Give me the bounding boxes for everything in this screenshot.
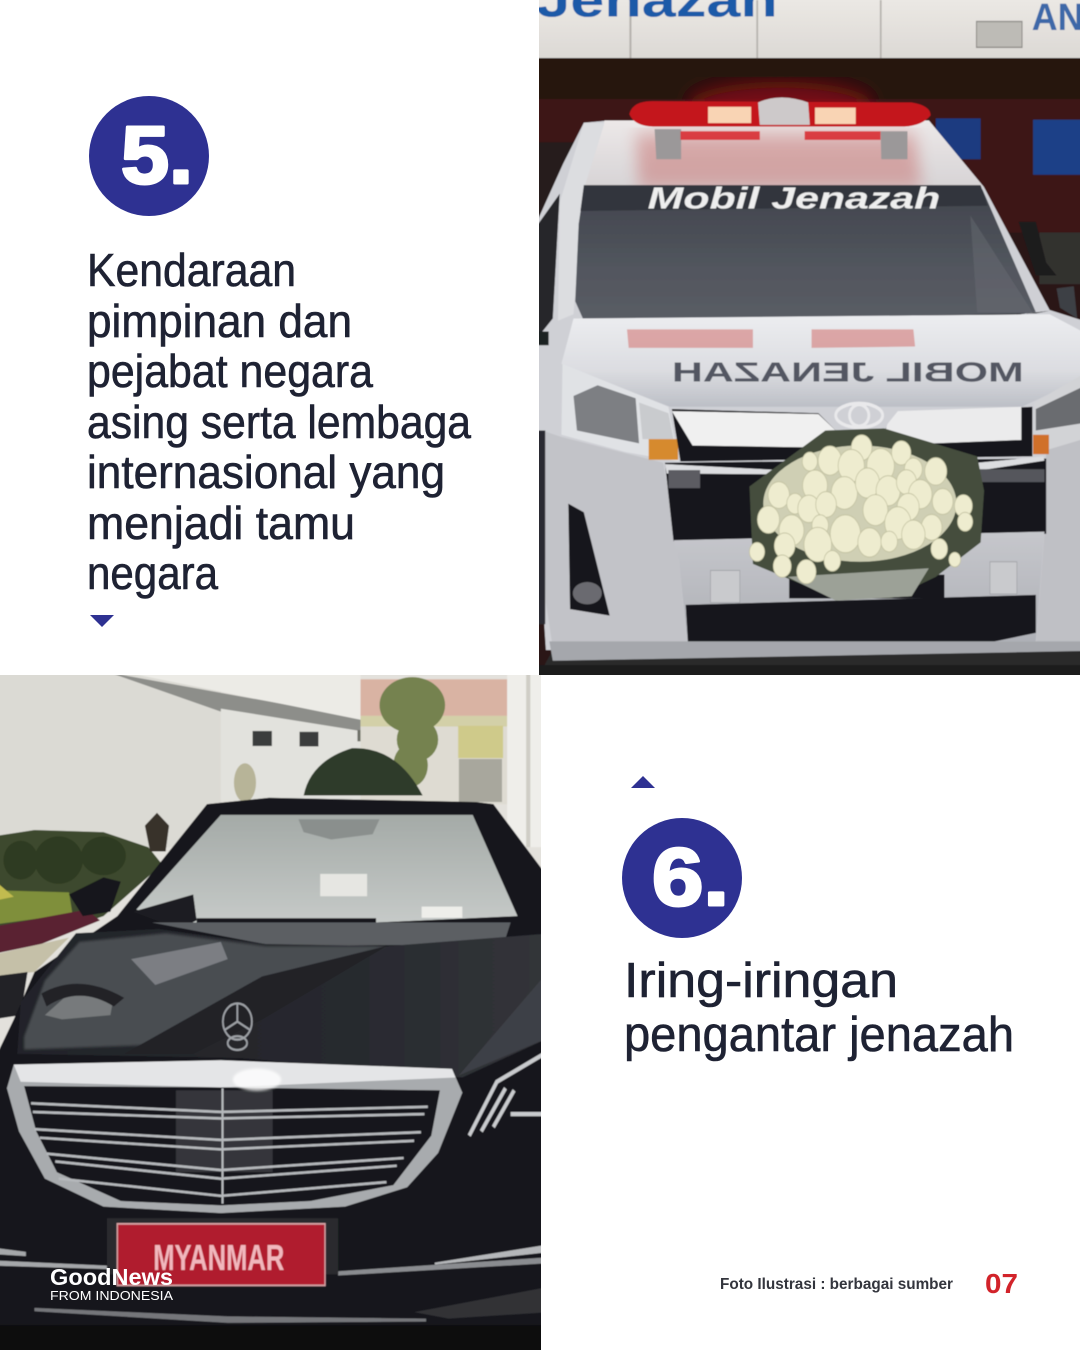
text block: item 6 (624, 954, 1014, 1062)
text block: item 5 (87, 244, 472, 599)
photo: white hearse van: MOBIL JENAZAH (672, 357, 1024, 388)
chrome grille bar (672, 407, 1032, 461)
text block: item 5: menjadi tamu (87, 497, 355, 549)
windshield (136, 815, 518, 923)
number badge 5 (89, 96, 209, 216)
headlights (561, 364, 679, 461)
lower grille (665, 458, 1046, 542)
photo credit: Foto Ilustrasi : berbagai sumber (720, 1276, 953, 1293)
license plate (107, 1218, 338, 1285)
text block: item 5: pejabat negara (87, 345, 373, 397)
headlight (459, 1041, 551, 1151)
page number: 07 (985, 1268, 1018, 1299)
car body (0, 798, 551, 1350)
text block: item 6: pengantar jenazah (624, 1008, 1014, 1062)
text block: item 6: Iring-iringan (624, 954, 898, 1008)
lower trim (435, 1244, 551, 1265)
side and lower body panel (1036, 437, 1080, 646)
flower bouquet (749, 428, 984, 601)
toyota emblem (836, 403, 883, 427)
logo: GoodNews from Indonesia: FROM INDONESIA (50, 1288, 173, 1303)
number badge 6 (622, 818, 742, 938)
arrow: pointing down (90, 615, 114, 627)
mercedes star (223, 1003, 252, 1050)
logo: GoodNews from Indonesia (50, 1264, 173, 1303)
number badge 5: 5. (121, 110, 193, 201)
text block: item 5: Kendaraan (87, 244, 296, 296)
bumper (674, 532, 1044, 641)
windshield (575, 189, 1036, 321)
arrow: pointing up (631, 776, 655, 788)
hood (561, 314, 1080, 407)
license plate: MYANMAR (153, 1237, 284, 1278)
red roof light bar (629, 98, 931, 159)
photo: white hearse van: Mobil Jenazah (648, 181, 940, 215)
hood (17, 929, 551, 1078)
text block: item 5: negara (87, 547, 218, 599)
text block: item 5: internasional yang (87, 446, 445, 498)
text block: item 5: pimpinan dan (87, 295, 352, 347)
photo: white hearse van (539, 0, 1080, 675)
photo: black Mercedes with Myanmar plate (0, 675, 541, 1350)
logo: GoodNews from Indonesia: GoodNews (50, 1264, 173, 1290)
van body (532, 121, 1080, 650)
number badge 6: 6. (652, 832, 729, 923)
grille (7, 1060, 462, 1213)
hedge (0, 830, 162, 955)
